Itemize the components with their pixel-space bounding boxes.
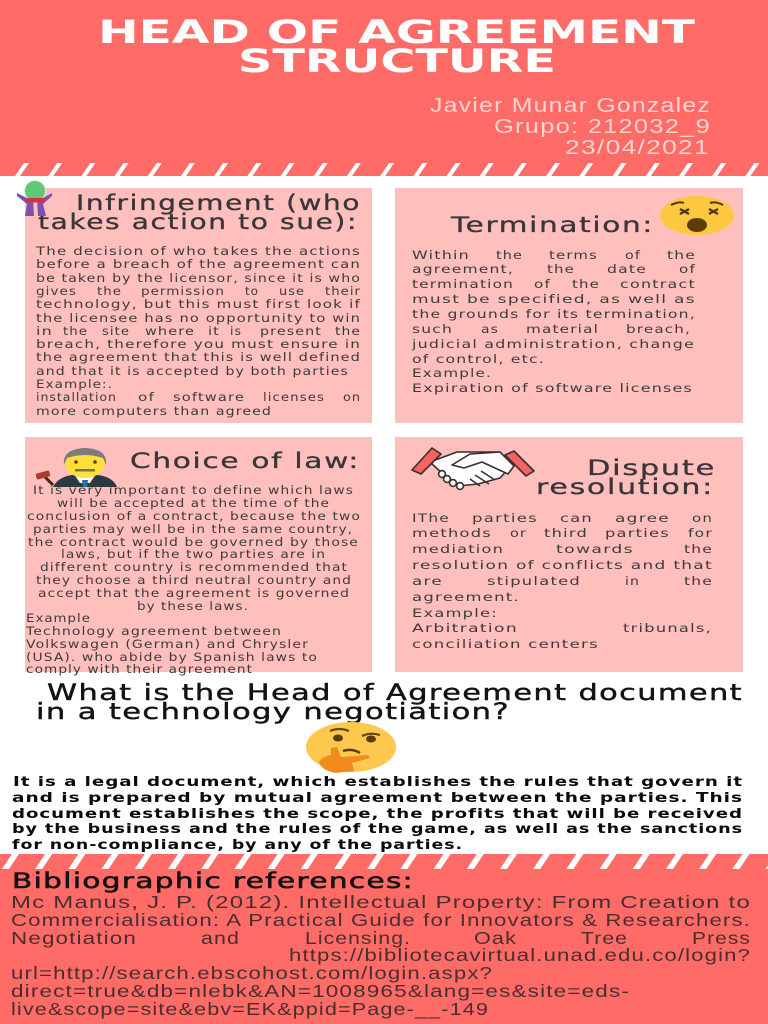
- body text: infringement: present: [260, 324, 322, 338]
- body text: dispute resolution: mediation: [412, 542, 504, 556]
- body text: dispute resolution: [412, 511, 713, 651]
- body text: dispute resolution: IThe: [412, 511, 450, 525]
- heading: dispute resolution: Dispute: [587, 456, 716, 480]
- body text: infringement: Example:.: [36, 377, 113, 391]
- body text: infringement: is: [230, 324, 242, 338]
- description paragraph: by the business and the rules of the game, as well as the sanctions: [12, 821, 743, 837]
- body text: dispute resolution: are: [412, 574, 443, 588]
- heading: termination: Termination:: [450, 213, 654, 237]
- body text: dispute resolution: agree: [615, 511, 670, 525]
- body text: dispute resolution: can: [560, 511, 593, 525]
- body text: termination: the grounds for its termination,: [412, 307, 696, 321]
- author details: Javier Munar Gonzalez: [430, 95, 711, 117]
- body text: dispute resolution: third: [544, 526, 588, 540]
- body text: infringement: software: [173, 390, 245, 404]
- body text: termination: [411, 248, 696, 395]
- body text: infringement: it: [208, 324, 220, 338]
- body text: termination: of: [534, 277, 551, 291]
- body text: termination: Expiration of software licenses: [412, 381, 693, 395]
- body text: dispute resolution: parties: [605, 526, 670, 540]
- body text: termination: termination: [412, 277, 514, 291]
- body text: infringement: gives: [36, 284, 77, 298]
- body text: termination: judicial administration, change: [411, 337, 695, 351]
- body text: choice of law: by these laws.: [137, 599, 249, 613]
- body text: infringement: [35, 244, 361, 418]
- heading: choice of law: Choice of law:: [130, 449, 360, 473]
- heading: infringement: Infringement (who: [76, 191, 361, 215]
- icon: figure holding green globe: [17, 180, 52, 216]
- references text: [11, 892, 751, 1020]
- body text: termination: breach,: [626, 322, 691, 336]
- body text: dispute resolution: stipulated: [487, 574, 581, 588]
- body text: termination: agreement,: [412, 262, 514, 276]
- body text: infringement: licenses: [263, 390, 325, 404]
- body text: choice of law: Volkswagen (German) and Chrysler: [26, 637, 309, 651]
- body text: infringement: The decision of who takes the actions: [35, 244, 361, 258]
- body text: termination: terms: [549, 248, 598, 262]
- references text: direct=true&db=nlebk&AN=1008965&lang=es&site=eds-: [11, 981, 630, 1001]
- heading: what is the head of agreement document: What is the Head of Agreement document: [47, 681, 743, 706]
- body text: choice of law: accept that the agreement is governed: [38, 586, 350, 600]
- body text: termination: the: [547, 262, 575, 276]
- panel: dispute resolution: [395, 437, 743, 672]
- body text: termination: of: [625, 248, 641, 262]
- body text: infringement: on: [343, 390, 361, 404]
- body text: choice of law: (USA). who abide by Spanish laws to: [26, 650, 318, 664]
- references text: Press: [692, 928, 751, 948]
- body text: choice of law: It is very important to define which laws: [33, 483, 354, 497]
- heading: bibliographic references: Bibliographic references:: [12, 869, 414, 893]
- panel: choice of law: [25, 437, 372, 676]
- body text: dispute resolution: conciliation centers: [412, 637, 599, 651]
- panel: termination: [395, 188, 743, 423]
- heading: what is the head of agreement document: in a technology negotiation?: [36, 700, 510, 725]
- body text: choice of law: comply with their agreement: [26, 662, 253, 676]
- references text: and: [201, 928, 240, 948]
- body text: dispute resolution: the: [684, 542, 713, 556]
- body text: choice of law: Technology agreement between: [25, 624, 282, 638]
- description paragraph: and is prepared by mutual agreement between the parties. This: [12, 790, 743, 806]
- body text: dispute resolution: for: [688, 526, 713, 540]
- references text: url=http://search.ebscohost.com/login.aspx?: [11, 963, 493, 983]
- body text: infringement: the: [63, 324, 88, 338]
- heading: infringement: takes action to sue):: [38, 210, 358, 234]
- body text: choice of law: conclusion of a contract, because the two: [27, 509, 361, 523]
- body text: dispute resolution: towards: [556, 542, 634, 556]
- body text: dispute resolution: methods: [412, 526, 492, 540]
- body text: choice of law: parties may well be in the same country,: [33, 522, 353, 536]
- body text: termination: of control, etc.: [412, 352, 545, 366]
- body text: termination: must be specified, as well as: [412, 292, 696, 306]
- body text: choice of law: laws, but if the two parties are in: [61, 547, 326, 561]
- references text: Commercialisation: A Practical Guide for Innovators & Researchers.: [11, 910, 751, 930]
- author details: [430, 95, 711, 159]
- body text: infringement: and that it is accepted by both parties: [36, 364, 349, 378]
- body text: infringement: before a breach of the agreement can: [36, 257, 361, 271]
- body text: infringement: breach, therefore you must ensure in: [36, 337, 361, 351]
- body text: infringement: the: [335, 324, 361, 338]
- references text: Oak: [474, 928, 517, 948]
- body text: dispute resolution: agreement.: [412, 590, 520, 604]
- body text: choice of law: Example: [26, 611, 91, 625]
- references text: Licensing.: [305, 928, 411, 948]
- body text: infringement: the: [97, 284, 122, 298]
- title: [98, 13, 695, 80]
- body text: termination: of: [679, 262, 696, 276]
- references text: Tree: [581, 928, 628, 948]
- body text: termination: date: [607, 262, 647, 276]
- references text: Negotiation: [11, 928, 137, 948]
- heading: dispute resolution: resolution:: [536, 475, 714, 499]
- body text: termination: Within: [412, 248, 470, 262]
- body text: infringement: use: [279, 284, 305, 298]
- body text: dispute resolution: Arbitration: [412, 621, 518, 635]
- body text: termination: the: [667, 248, 696, 262]
- body text: dispute resolution: parties: [472, 511, 538, 525]
- body text: termination: contract: [620, 277, 696, 291]
- author details: Grupo: 212032_9: [494, 116, 711, 138]
- body text: termination: as: [481, 322, 499, 336]
- body text: infringement: technology, but this must first look if: [36, 297, 361, 311]
- body text: dispute resolution: or: [510, 526, 527, 540]
- body text: infringement: installation: [36, 390, 117, 404]
- body text: infringement: more computers than agreed: [36, 404, 272, 418]
- references text: Mc Manus, J. P. (2012). Intellectual Property: From Creation to: [11, 892, 751, 912]
- body text: choice of law: different country is recommended that: [40, 560, 348, 574]
- header band: [0, 0, 768, 176]
- panel: infringement: [25, 188, 372, 423]
- description paragraph: document establishes the scope, the profits that will be received: [12, 806, 743, 822]
- body text: infringement: their: [325, 284, 361, 298]
- body text: choice of law: they choose a third neutral country and: [36, 573, 352, 587]
- body text: termination: Example.: [412, 366, 492, 380]
- body text: choice of law: will be accepted at the time of the: [57, 496, 330, 510]
- body text: infringement: the licensee has no opportunity to win: [36, 311, 361, 325]
- body text: infringement: in: [36, 324, 53, 338]
- references text: live&scope=site&ebv=EK&ppid=Page-__-149: [11, 999, 489, 1020]
- body text: infringement: where: [145, 324, 195, 338]
- body text: dispute resolution: resolution of conflicts and that: [412, 558, 713, 572]
- description paragraph: It is a legal document, which establishes the rules that govern it: [13, 774, 743, 790]
- references band: [0, 854, 768, 1024]
- body text: dispute resolution: in: [625, 574, 640, 588]
- description paragraph: [12, 774, 743, 853]
- body text: infringement: site: [102, 324, 130, 338]
- body text: dispute resolution: tribunals,: [623, 621, 712, 635]
- body text: termination: the: [572, 277, 600, 291]
- body text: infringement: of: [138, 390, 155, 404]
- icon: judge with gavel: [35, 448, 117, 487]
- body text: infringement: permission: [141, 284, 225, 298]
- body text: dispute resolution: on: [692, 511, 713, 525]
- body text: infringement: be taken by the licensor, since it is who: [36, 271, 361, 285]
- heading: infringement: [38, 191, 361, 234]
- icon: dizzy face emoji: [660, 196, 734, 235]
- body text: termination: the: [496, 248, 523, 262]
- title: STRUCTURE: [238, 42, 556, 80]
- body text: choice of law: [25, 483, 361, 676]
- title: HEAD OF AGREEMENT: [98, 13, 695, 51]
- body text: infringement: the agreement that this is well defined: [36, 350, 361, 364]
- heading: dispute resolution: [536, 456, 716, 499]
- body text: termination: material: [526, 322, 599, 336]
- body text: infringement: to: [245, 284, 259, 298]
- body text: termination: such: [412, 322, 453, 336]
- icon: handshake: [412, 448, 534, 489]
- icon: thinking face emoji: [306, 722, 396, 773]
- author details: 23/04/2021: [565, 137, 710, 159]
- description paragraph: for non-compliance, by any of the parties.: [12, 837, 463, 853]
- body text: dispute resolution: Example:: [412, 606, 498, 620]
- body text: dispute resolution: the: [684, 574, 713, 588]
- body text: choice of law: the contract would be governed by those: [28, 535, 359, 549]
- heading: what is the head of agreement document: [36, 681, 743, 725]
- references text: https://bibliotecavirtual.unad.edu.co/login?: [289, 945, 751, 965]
